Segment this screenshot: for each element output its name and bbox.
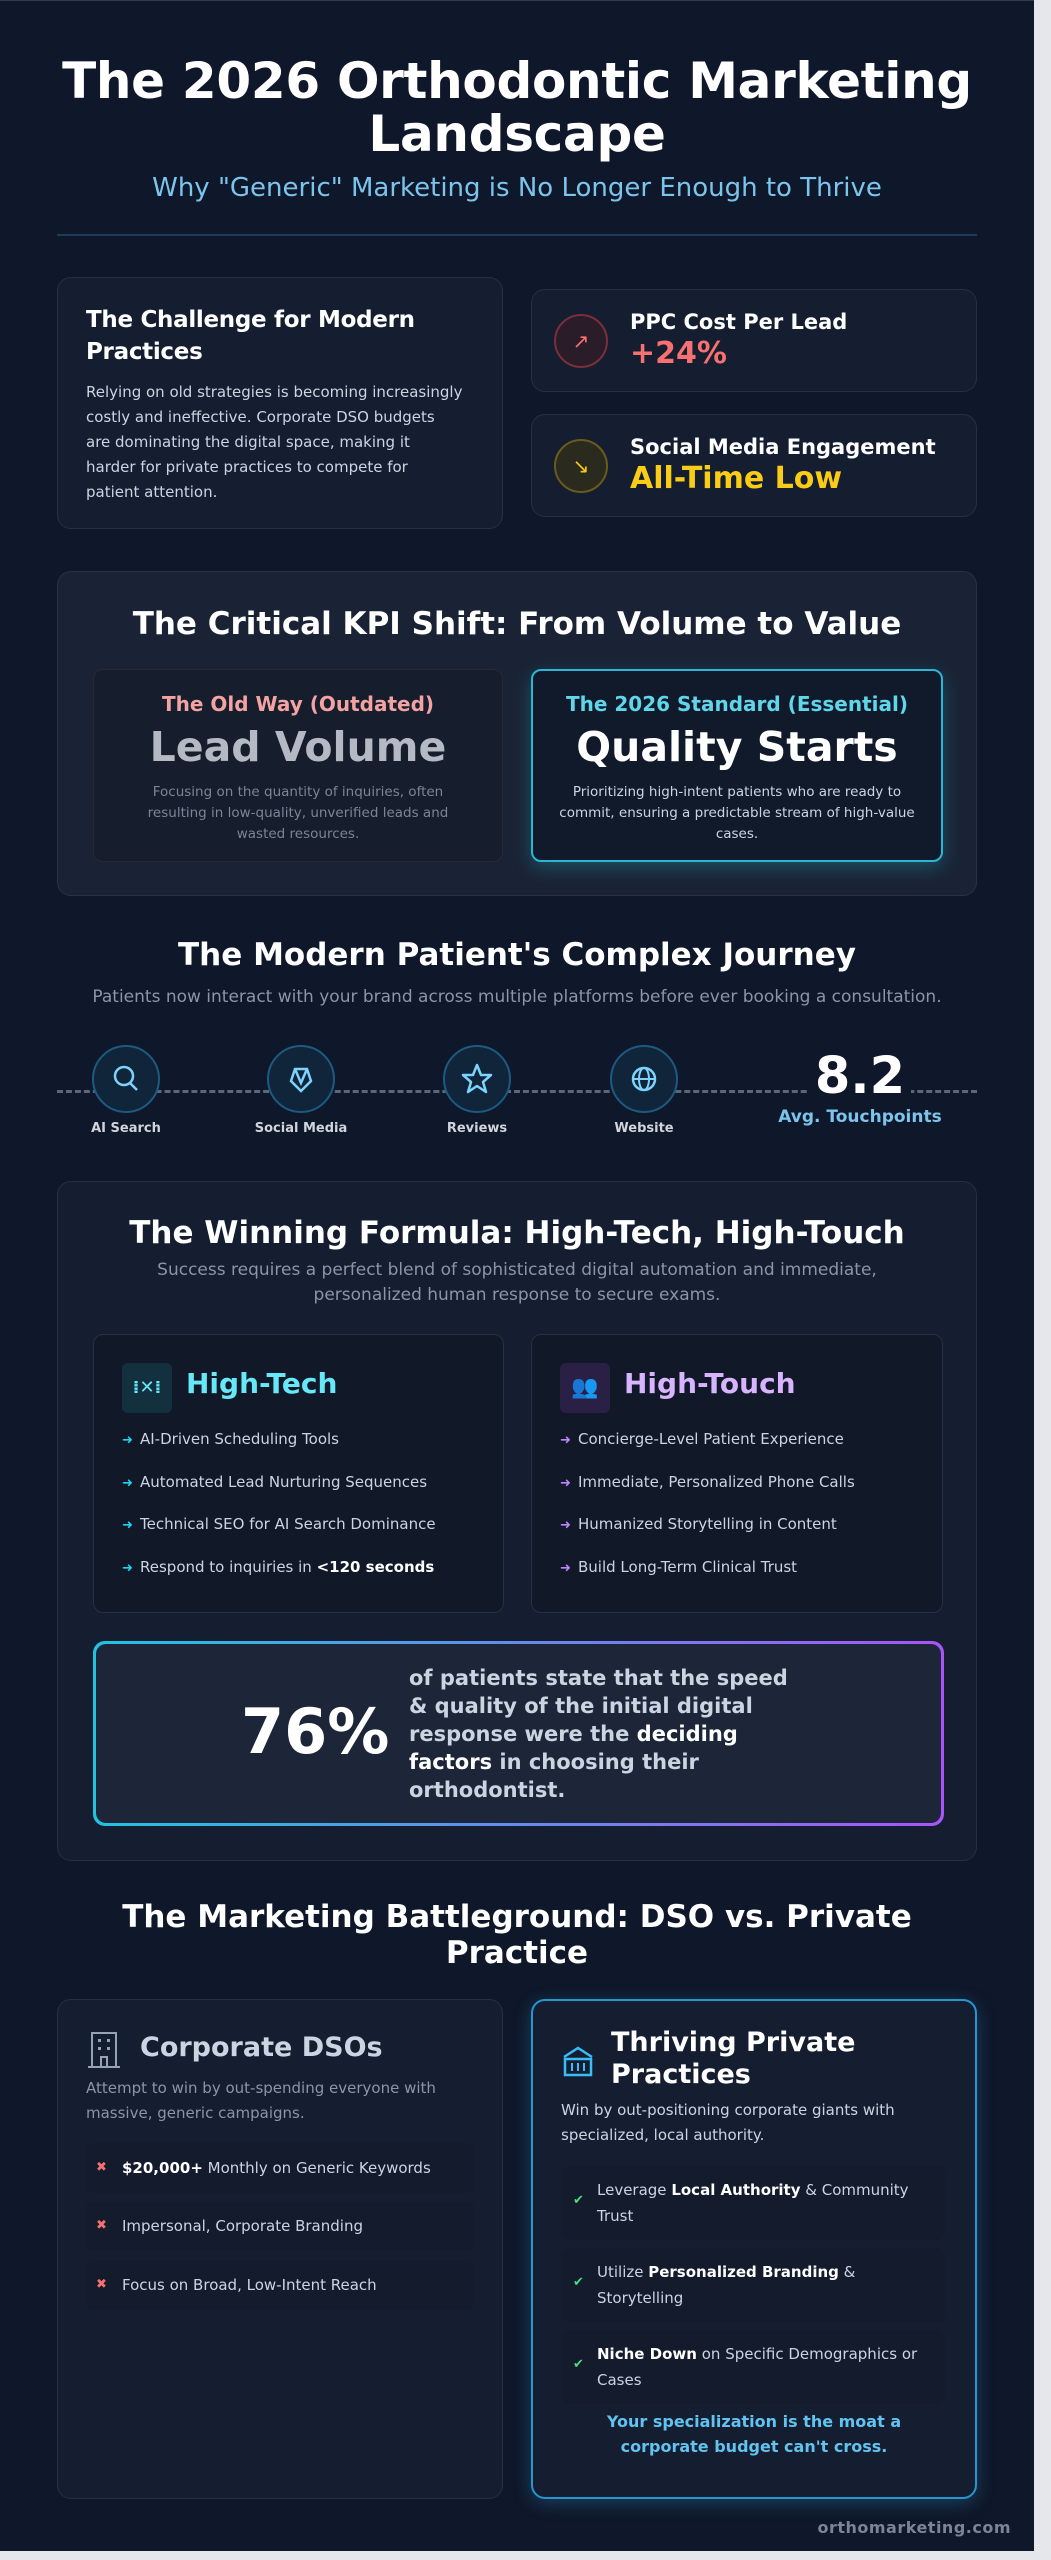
PPC value: +24%	[630, 336, 727, 371]
high-tech card: Technical SEO for AI Search Dominance	[140, 1515, 436, 1533]
title: The 2026 Orthodontic Marketing	[62, 52, 972, 110]
high-tech card: Respond to inquiries in <120 seconds	[140, 1558, 434, 1576]
panel: corporate DSOs: Focus on Broad, Low-Intent Reach	[122, 2276, 377, 2294]
old way card: The Old Way (Outdated)	[162, 692, 434, 716]
panel: KPI shift	[57, 571, 977, 896]
high-tech card: ➜	[122, 1561, 133, 1576]
panel: private practices: Win by out-positioning corporate giants with specialized, local authority.	[561, 2101, 895, 2144]
2026 standard card: Prioritizing high-intent patients who are ready to commit, ensuring a predictable stream of high-value cases.	[559, 784, 915, 842]
quote: Your specialization is the moat a corporate budget can't cross.	[607, 2412, 901, 2456]
formula heading: The Winning Formula: High-Tech, High-Touch	[129, 1215, 905, 1251]
high-touch card: ➜	[560, 1476, 571, 1491]
high-tech card: ➜	[122, 1518, 133, 1533]
icon: trend down	[554, 439, 608, 493]
panel: private practices: ✔	[573, 2357, 584, 2372]
challenge text: harder for private practices to compete for	[86, 458, 408, 476]
panel: private practices: Utilize Personalized Branding & Storytelling	[597, 2263, 855, 2307]
icon: building	[88, 2032, 120, 2068]
challenge text: patient attention.	[86, 483, 217, 501]
touchpoints stat: 8.2	[815, 1047, 905, 1106]
footer: orthomarketing.com	[817, 2518, 1011, 2537]
challenge heading: Practices	[86, 339, 202, 365]
icon: chip	[122, 1363, 172, 1413]
old way card: Focusing on the quantity of inquiries, often resulting in low-quality, unverified leads and wasted resources.	[148, 784, 448, 842]
callout: 76%: 76%	[241, 1695, 389, 1768]
high-touch card: Build Long-Term Clinical Trust	[578, 1558, 797, 1576]
PPC label: PPC Cost Per Lead	[630, 310, 847, 334]
touchpoints stat	[778, 1047, 942, 1127]
high-tech card: AI-Driven Scheduling Tools	[140, 1430, 339, 1448]
challenge heading: The Challenge for Modern	[86, 307, 415, 333]
icon: trend up: ↗	[573, 329, 589, 353]
challenge text: are dominating the digital space, making it	[86, 433, 410, 451]
icon: institution	[563, 2046, 593, 2076]
icon: AI search	[92, 1045, 160, 1113]
high-touch card: Immediate, Personalized Phone Calls	[578, 1473, 855, 1491]
high-touch card: ➜	[560, 1518, 571, 1533]
panel: corporate DSOs: ✖	[96, 2277, 107, 2292]
callout: 76%	[93, 1641, 944, 1826]
2026 standard card: Quality Starts	[576, 723, 898, 771]
2026 standard card: The 2026 Standard (Essential)	[566, 692, 908, 716]
social value: All-Time Low	[630, 461, 842, 496]
label reviews: Reviews	[447, 1121, 507, 1136]
subtitle: Why "Generic" Marketing is No Longer Enough to Thrive	[152, 173, 882, 203]
panel: corporate DSOs: Corporate DSOs	[140, 2032, 383, 2063]
high-tech card: High-Tech	[186, 1367, 337, 1400]
panel: private practices: ✔	[573, 2193, 584, 2208]
icon: trend up	[554, 314, 608, 368]
journey heading: The Modern Patient's Complex Journey	[178, 937, 856, 973]
panel: private practices: Niche Down on Specific Demographics or Cases	[597, 2345, 917, 2389]
title: Landscape	[368, 105, 666, 163]
battleground heading: The Marketing Battleground: DSO vs. Private	[122, 1899, 912, 1935]
journey subtitle: Patients now interact with your brand across multiple platforms before ever booking a consultation.	[92, 987, 942, 1007]
challenge text: costly and ineffective. Corporate DSO budgets	[86, 408, 435, 426]
journey icons	[91, 1045, 678, 1136]
icon: website	[610, 1045, 678, 1113]
battleground heading	[122, 1899, 912, 1971]
icon: social	[267, 1045, 335, 1113]
panel: private practices: Practices	[611, 2059, 751, 2090]
icon: people: 👥	[571, 1375, 599, 1400]
high-touch card	[531, 1334, 943, 1613]
panel: corporate DSOs: ✖	[96, 2160, 107, 2175]
high-touch card: Concierge-Level Patient Experience	[578, 1430, 844, 1448]
icon: trend down: ↘	[573, 454, 589, 478]
panel: private practices: Leverage Local Authority & Community Trust	[597, 2181, 909, 2225]
icon: chip: ⁞✕⁞	[133, 1377, 161, 1398]
panel: challenge	[57, 277, 503, 529]
panel: corporate DSOs	[57, 1999, 503, 2499]
battleground heading: Practice	[446, 1935, 588, 1971]
KPI heading: The Critical KPI Shift: From Volume to Value	[133, 606, 901, 642]
high-touch card: ➜	[560, 1433, 571, 1448]
challenge text	[86, 383, 462, 501]
2026 standard card	[531, 669, 943, 862]
title	[62, 52, 972, 163]
panel: winning formula	[57, 1181, 977, 1861]
stat card: PPC	[531, 289, 977, 392]
high-touch card: Humanized Storytelling in Content	[578, 1515, 837, 1533]
social label: Social Media Engagement	[630, 435, 936, 459]
old way card	[93, 669, 503, 862]
old way card: Lead Volume	[150, 723, 446, 771]
challenge text: Relying on old strategies is becoming increasingly	[86, 383, 462, 401]
touchpoints stat: Avg. Touchpoints	[778, 1107, 942, 1127]
icon: people	[560, 1363, 610, 1413]
panel: corporate DSOs: ✖	[96, 2218, 107, 2233]
panel: corporate DSOs: Impersonal, Corporate Branding	[122, 2217, 363, 2235]
panel: private practices: ✔	[573, 2275, 584, 2290]
label social: Social Media	[255, 1121, 347, 1136]
formula subtitle: Success requires a perfect blend of sophisticated digital automation and immediate, personalized human response to secure exams.	[157, 1260, 877, 1305]
callout: 76%: of patients state that the speed & quality of the initial digital response were the deciding factors in choosing their orthodontist.	[409, 1666, 788, 1802]
icon: reviews	[443, 1045, 511, 1113]
panel: private practices	[531, 1999, 977, 2499]
high-tech card: ➜	[122, 1433, 133, 1448]
high-tech card: ➜	[122, 1476, 133, 1491]
challenge heading	[86, 307, 415, 365]
high-tech card	[93, 1334, 504, 1613]
high-touch card: High-Touch	[624, 1367, 796, 1400]
panel: corporate DSOs: Attempt to win by out-spending everyone with massive, generic campaigns.	[86, 2079, 436, 2122]
panel: private practices: Thriving Private	[611, 2027, 855, 2058]
label AI search: AI Search	[91, 1121, 161, 1136]
panel: corporate DSOs: $20,000+ Monthly on Generic Keywords	[122, 2159, 431, 2177]
label website: Website	[614, 1121, 674, 1136]
high-tech card: Automated Lead Nurturing Sequences	[140, 1473, 427, 1491]
stat card: social	[531, 414, 977, 517]
high-touch card: ➜	[560, 1561, 571, 1576]
